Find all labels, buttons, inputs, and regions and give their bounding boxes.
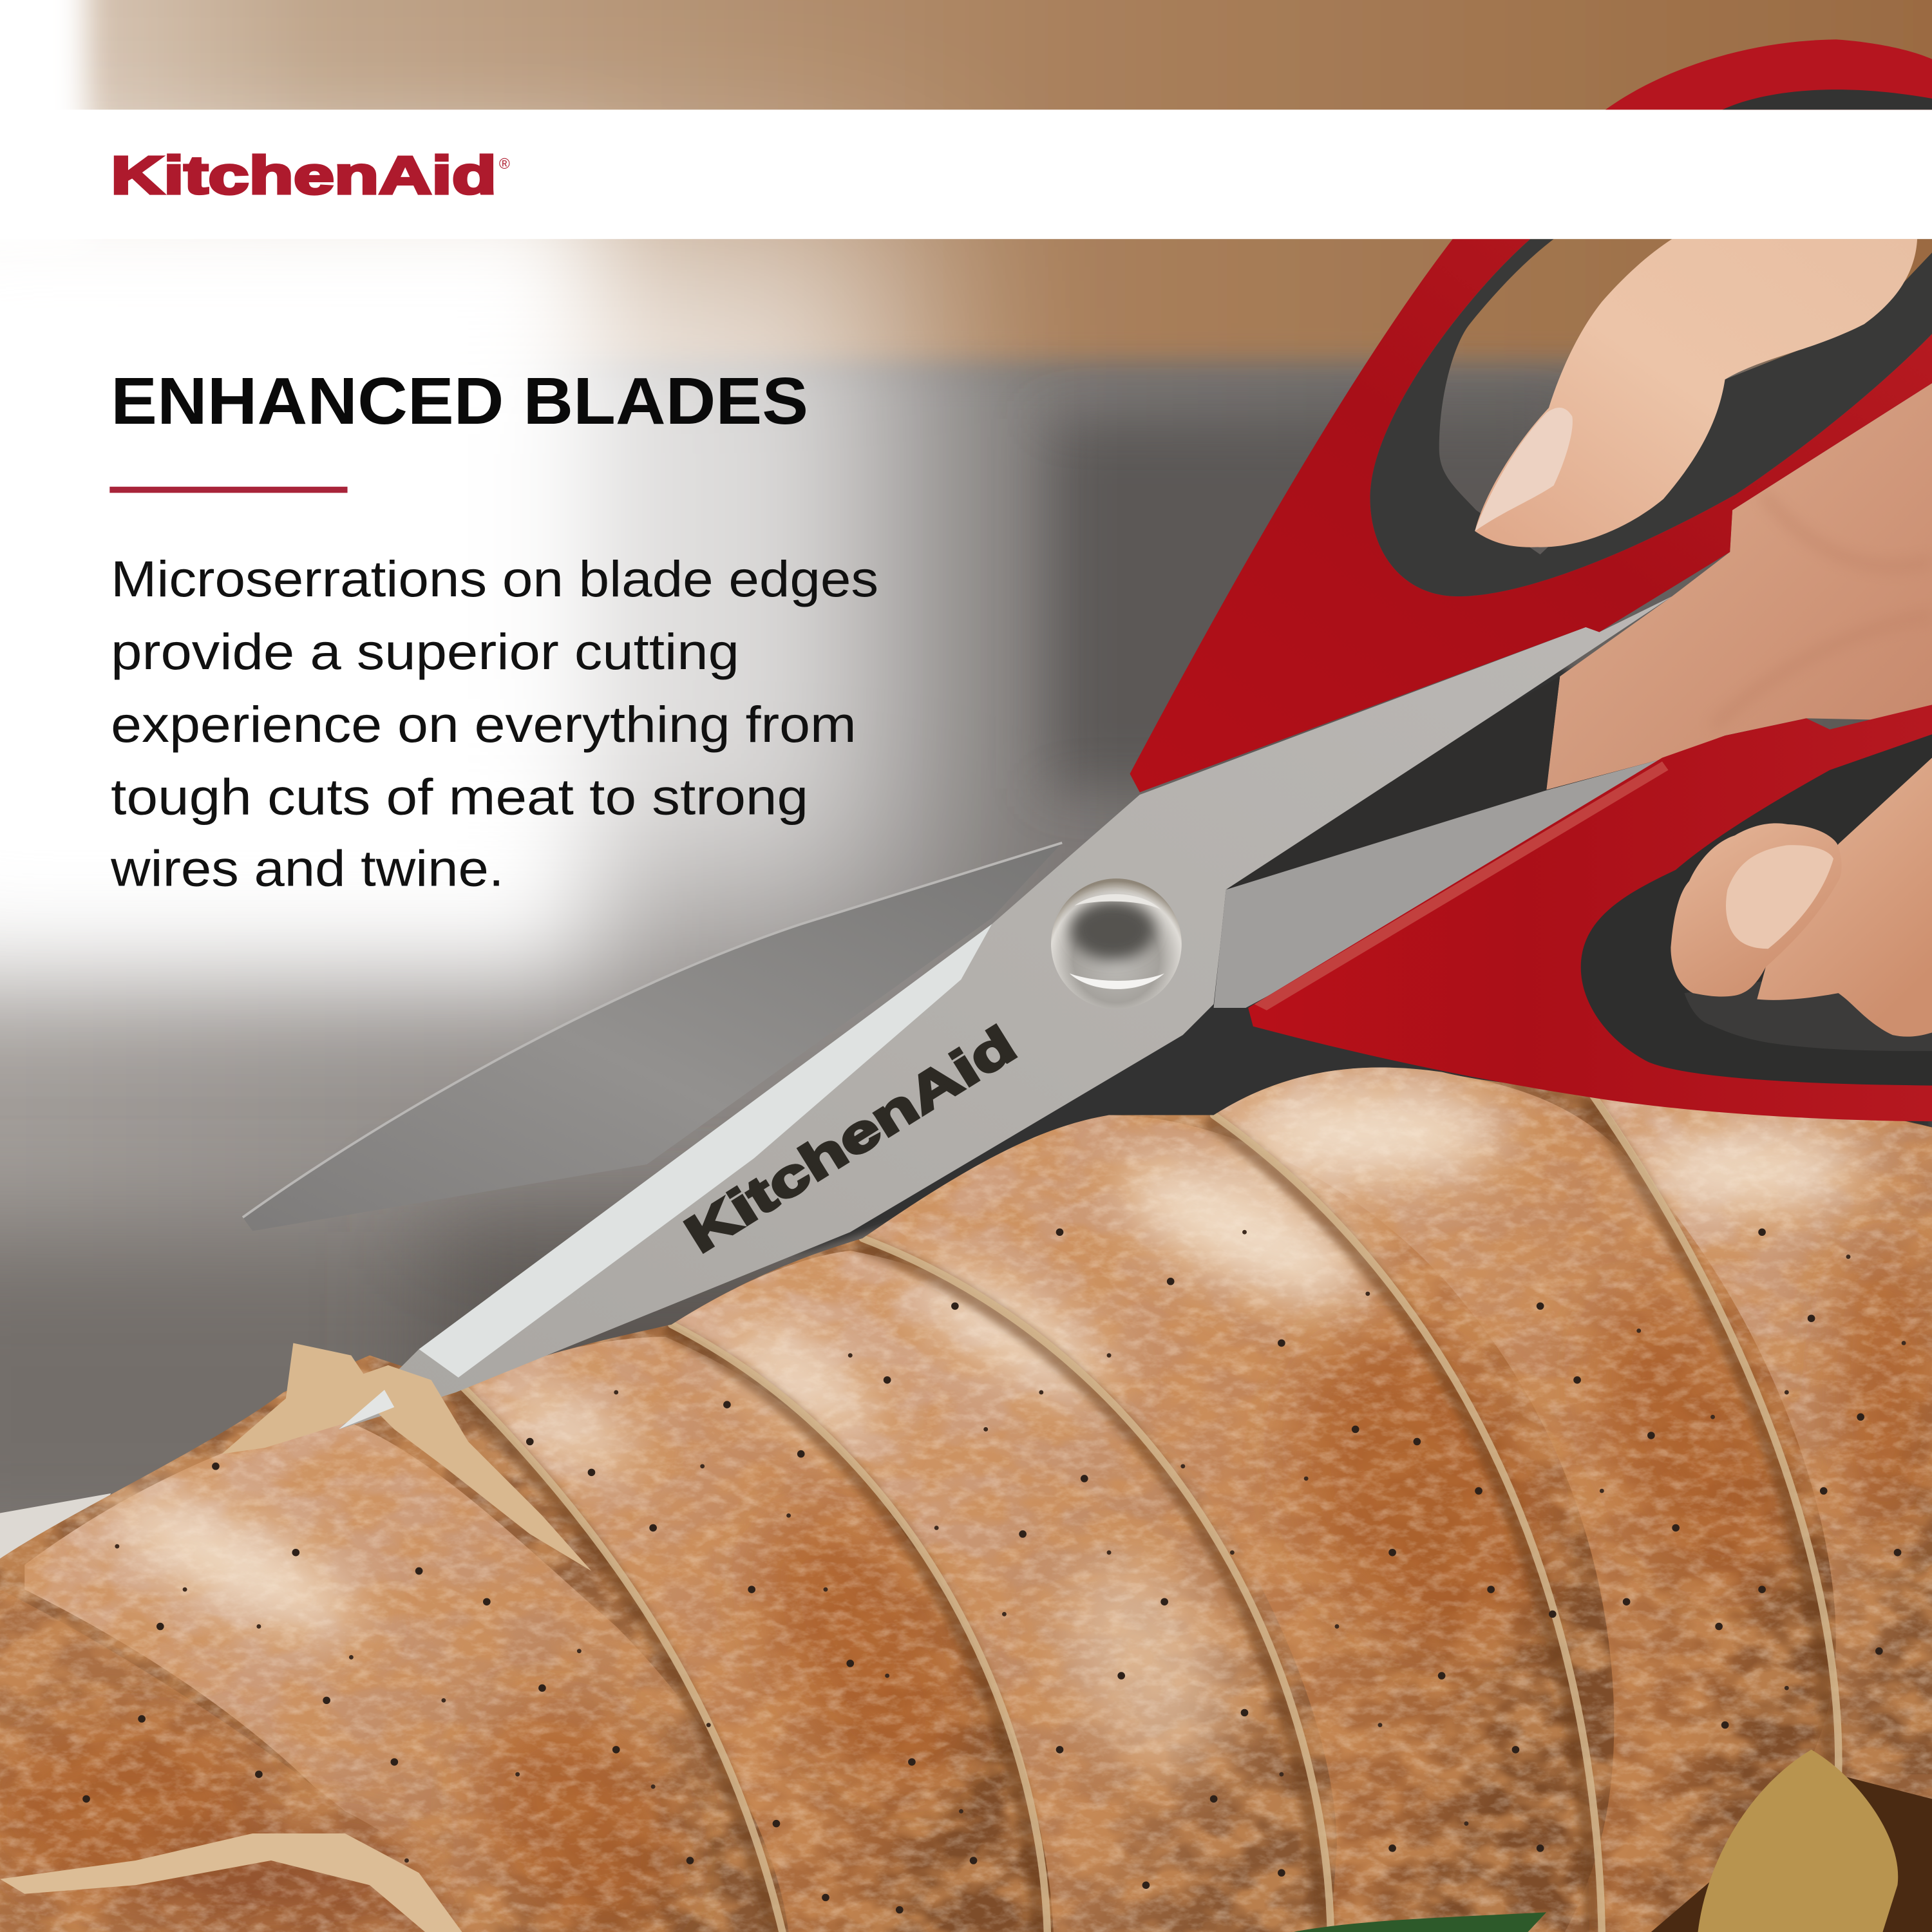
red handle body [1130, 239, 1932, 792]
cream highlights [95, 1087, 1861, 1795]
serrated cutting edge [419, 924, 992, 1378]
etched logo on blade: KitchenAid [676, 1015, 1026, 1264]
roll segment seven [1589, 1084, 1932, 1774]
roast meat [0, 1059, 1932, 1932]
pepper speckles [74, 1232, 1898, 1910]
red handle body [1248, 705, 1932, 1121]
roll segment two [24, 1417, 788, 1932]
seam shadows [456, 1094, 1830, 1932]
hole behind fingers [1684, 980, 1932, 1051]
thumbnail [1475, 408, 1573, 531]
fine pepper speckles [117, 1232, 1904, 1861]
roll segment one [0, 1589, 462, 1932]
dark rubber grip [1581, 734, 1932, 1086]
brand logo: ® [499, 155, 510, 172]
top handle above band [1605, 39, 1932, 109]
body copy: experience on everything from [111, 696, 857, 753]
rear blade arm [1214, 759, 1676, 1008]
roll segment six [1214, 1068, 1836, 1932]
brand logo: KitchenAid [111, 146, 497, 205]
body copy: Microserrations on blade edges [111, 551, 878, 607]
heading underline [109, 487, 348, 493]
dark gap between the blades [1226, 676, 1560, 889]
roll segment three [462, 1337, 1054, 1932]
roll segment four [672, 1251, 1337, 1932]
lower left meat flap [0, 1833, 462, 1932]
dark rubber grip [1370, 239, 1932, 596]
body copy [110, 551, 878, 897]
seared orange patches [0, 1244, 1932, 1932]
front blade with pivot arm [339, 596, 1672, 1429]
roast potato [1698, 1750, 1898, 1932]
hand palm [1546, 383, 1932, 790]
white brand band [0, 109, 1932, 239]
body copy: tough cuts of meat to strong [111, 769, 808, 826]
thumb [1475, 239, 1917, 547]
twine seams [462, 1090, 1839, 1932]
bottom scissor handle [1248, 705, 1932, 1121]
palm crease shading [1712, 493, 1932, 727]
heading: ENHANCED BLADES [111, 363, 808, 438]
rear blade tip [243, 843, 1062, 1231]
fingers in lower grip [1671, 758, 1932, 1037]
roll segment five [862, 1115, 1614, 1932]
green herb [1294, 1912, 1546, 1932]
top left meat flap [222, 1343, 591, 1571]
roasted vegetables shadow [1651, 1774, 1932, 1932]
pale edge on handle [1255, 761, 1669, 1010]
top scissor handle [1130, 239, 1932, 792]
surface texture [0, 1059, 1932, 1932]
body copy: provide a superior cutting [111, 623, 739, 680]
blade tip fragment [339, 1390, 394, 1429]
white plate [0, 1493, 111, 1589]
pivot rivet [1051, 878, 1182, 1009]
body copy: wires and twine. [110, 840, 504, 897]
